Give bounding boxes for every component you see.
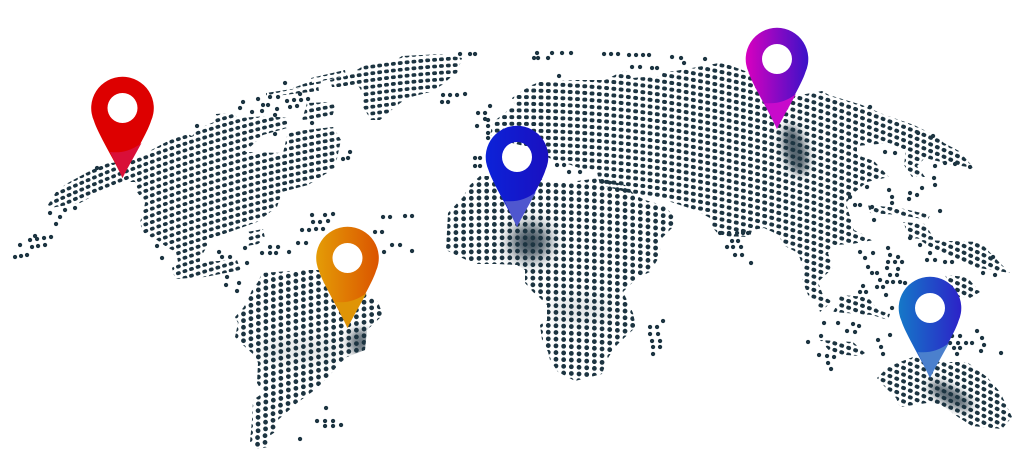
- pin: blue, Africa: [486, 126, 548, 227]
- scattered island dots: [15, 53, 1001, 439]
- land dots: North America and Greenland: [48, 54, 462, 279]
- land dots: South America and Africa: [235, 176, 674, 449]
- pin shadows on Asia and Australia: [778, 123, 975, 415]
- pin: red, North America: [91, 77, 154, 178]
- pin: sky blue, Australia: [899, 277, 961, 378]
- pin: orange, South America: [316, 227, 379, 328]
- land dots: Eurasia, Indonesia and Australia: [490, 63, 1012, 429]
- pin: purple, Asia: [746, 28, 808, 129]
- pin shadows on South America and Africa: [260, 224, 610, 360]
